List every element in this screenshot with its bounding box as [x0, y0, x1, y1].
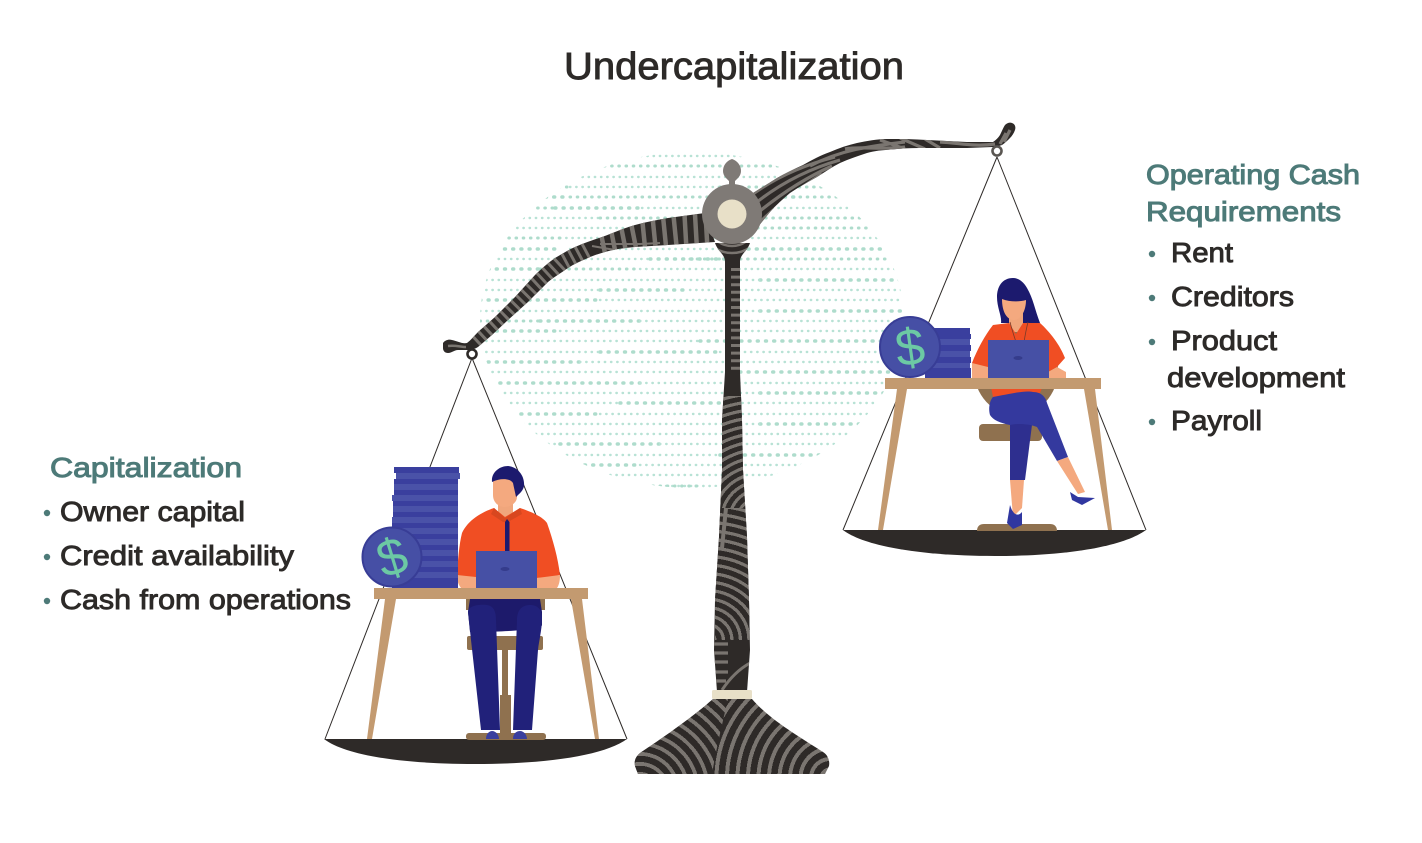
- left laptop: [476, 551, 537, 588]
- hair: [492, 466, 524, 497]
- tie: [505, 519, 510, 552]
- lower crossed leg: [1010, 411, 1033, 480]
- left desk: [367, 588, 599, 739]
- heading: Requirements: [1146, 196, 1341, 227]
- list: development: [1167, 362, 1345, 393]
- right leg: [513, 605, 542, 730]
- chair base: [466, 733, 546, 740]
- pivot hub: [702, 159, 762, 244]
- list: Payroll: [1171, 405, 1262, 436]
- collar band: [712, 690, 752, 699]
- chair back: [974, 325, 1058, 415]
- base overlap stripes: [635, 699, 728, 774]
- woman at desk: [972, 278, 1095, 531]
- face: [493, 478, 517, 507]
- desk top: [885, 378, 1101, 389]
- list: [1149, 237, 1345, 436]
- desk legs: [367, 599, 599, 739]
- heading: [1146, 159, 1360, 227]
- heading: Capitalization: [50, 452, 242, 483]
- hub disc: [702, 184, 762, 244]
- standing shoe: [1007, 505, 1022, 529]
- neck: [1009, 312, 1023, 332]
- list: Cash from operations: [60, 584, 351, 615]
- shirt: [972, 323, 1065, 397]
- list: Product: [1171, 325, 1277, 356]
- left hook ring: [468, 350, 476, 358]
- chair seat: [467, 636, 543, 650]
- finial: [723, 159, 741, 190]
- left coin: $: [370, 526, 415, 590]
- standing calf: [1010, 480, 1024, 517]
- chair base: [977, 524, 1057, 531]
- thigh: [989, 391, 1068, 461]
- shoes: [486, 731, 527, 739]
- list: Credit availability: [60, 540, 294, 571]
- right book stack: [925, 328, 971, 378]
- hub centre: [718, 200, 746, 228]
- desk top: [374, 588, 588, 599]
- right pan strings: [843, 157, 1146, 530]
- post: [714, 243, 750, 690]
- right coin: $: [892, 317, 929, 379]
- face: [1002, 299, 1026, 320]
- lap: [468, 599, 542, 632]
- arms: [972, 363, 1066, 378]
- left pan: [324, 739, 627, 764]
- list: Owner capital: [60, 496, 245, 527]
- hair: [997, 278, 1040, 323]
- man at desk: [457, 466, 560, 740]
- right laptop: [988, 340, 1049, 378]
- shirt: [457, 508, 560, 578]
- scale stand: [635, 191, 829, 774]
- right pan: [843, 530, 1146, 556]
- text block: operating cash requirements: [1146, 159, 1360, 436]
- necklace: [1010, 322, 1028, 342]
- chair seat: [979, 424, 1042, 441]
- arms: [457, 575, 560, 588]
- list: Rent: [1171, 237, 1233, 268]
- list: Creditors: [1171, 281, 1294, 312]
- scale beam right arm: [753, 122, 1016, 224]
- collar: [491, 508, 522, 522]
- dotted background circle: [480, 156, 905, 486]
- left leg: [468, 605, 500, 730]
- base: [635, 699, 829, 774]
- right coin: [880, 317, 940, 379]
- right hook ring: [992, 146, 1002, 156]
- list: [44, 496, 351, 615]
- desk legs: [878, 389, 1112, 530]
- text block: capitalization: [44, 452, 351, 615]
- scale beam left arm: [443, 213, 715, 353]
- left book stack: [392, 467, 460, 588]
- crossed shoe: [1070, 492, 1095, 505]
- right desk: [878, 378, 1112, 530]
- left pan strings: [325, 358, 627, 739]
- crossed calf: [1057, 457, 1085, 494]
- heading: Operating Cash: [1146, 159, 1360, 190]
- neck: [498, 500, 513, 518]
- chair pole: [500, 650, 511, 739]
- title: Undercapitalization: [564, 46, 904, 88]
- chair back: [466, 598, 545, 610]
